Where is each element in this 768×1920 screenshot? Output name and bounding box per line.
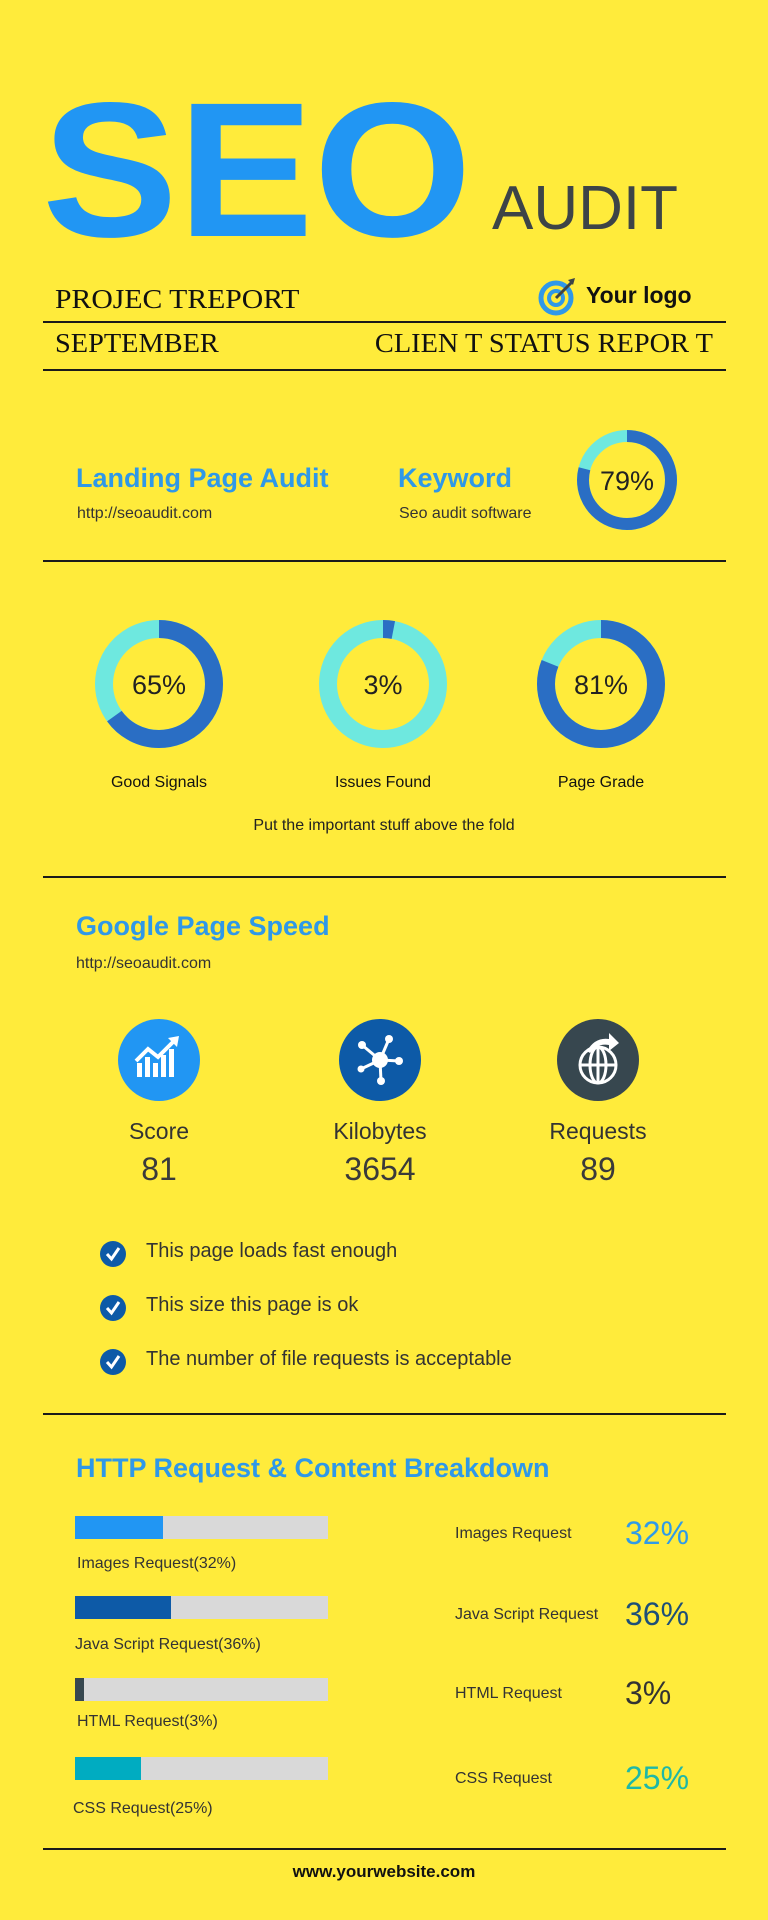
legend: html [455,1675,671,1711]
check item 2: This size this page is ok [146,1294,358,1316]
bar: html [75,1678,328,1701]
donut: issues found 3%: 3% [363,670,403,700]
donut: issues found 3%: Issues Found [335,774,431,791]
logo: Your logo [586,282,692,308]
text: CSS Request(25%) [73,1800,213,1817]
text: Images Request(32%) [77,1555,236,1572]
stat: kilobytes: 3654 [344,1151,416,1187]
logo [538,278,692,316]
panel: landing page audit: Landing Page Audit [76,463,328,493]
legend: html: 3% [625,1675,671,1711]
legend: javascript: Java Script Request [455,1606,598,1623]
checklist [100,1240,512,1375]
heading: http request breakdown: HTTP Request & Content Breakdown [76,1453,550,1483]
donut: issues found 3% [319,620,447,791]
bar: css [75,1757,328,1780]
legend: javascript: 36% [625,1596,689,1632]
title: AUDIT: AUDIT [492,174,678,243]
stat: kilobytes: Kilobytes [333,1118,427,1144]
check item 1: This page loads fast enough [146,1240,397,1262]
bar: images [75,1516,328,1539]
text: HTML Request(3%) [77,1713,218,1730]
legend: images: 32% [625,1515,689,1551]
donut: good signals 65%: Good Signals [111,774,207,791]
panel: keyword [398,463,532,522]
donut: page grade 81%: 81% [574,670,628,700]
panel: landing page audit [76,463,328,522]
legend: html: HTML Request [455,1685,562,1702]
panel: landing page audit: http://seoaudit.com [77,505,212,522]
donut: 79%: 79% [600,466,654,496]
check item 3: The number of file requests is acceptable [146,1348,512,1370]
stat: score [118,1019,200,1187]
stat: requests [549,1019,647,1187]
bar: javascript [75,1596,328,1619]
panel: keyword: Keyword [398,463,512,493]
stat: score: 81 [141,1151,177,1187]
donut: page grade 81%: Page Grade [558,774,644,791]
check item 2 [100,1294,358,1321]
legend: css [455,1760,689,1796]
legend: images: Images Request [455,1525,572,1542]
stat: kilobytes [333,1019,427,1187]
footer: website: www.yourwebsite.com [293,1862,475,1881]
stat: requests: 89 [580,1151,616,1187]
donut: good signals 65%: 65% [132,670,186,700]
text: project report: PROJEC TREPORT [55,284,299,314]
check item 1 [100,1240,397,1267]
donut: good signals 65% [95,620,223,791]
legend: css: 25% [625,1760,689,1796]
legend: javascript [455,1596,689,1632]
legend: images [455,1515,689,1551]
text: client status report: CLIEN T STATUS REPOR T [375,328,713,358]
text: september: SEPTEMBER [55,328,219,358]
text: Java Script Request(36%) [75,1636,261,1653]
donut: 79% [577,430,677,530]
title: SEO: SEO [42,62,472,277]
text: above the fold note: Put the important stuff above the fold [253,817,515,834]
heading: google page speed: Google Page Speed [76,911,330,941]
stat: requests: Requests [549,1118,647,1144]
donut: page grade 81% [537,620,665,791]
legend: css: CSS Request [455,1770,552,1787]
text: url: http://seoaudit.com [76,955,211,972]
stat: score: Score [129,1118,189,1144]
panel: keyword: Seo audit software [399,505,532,522]
